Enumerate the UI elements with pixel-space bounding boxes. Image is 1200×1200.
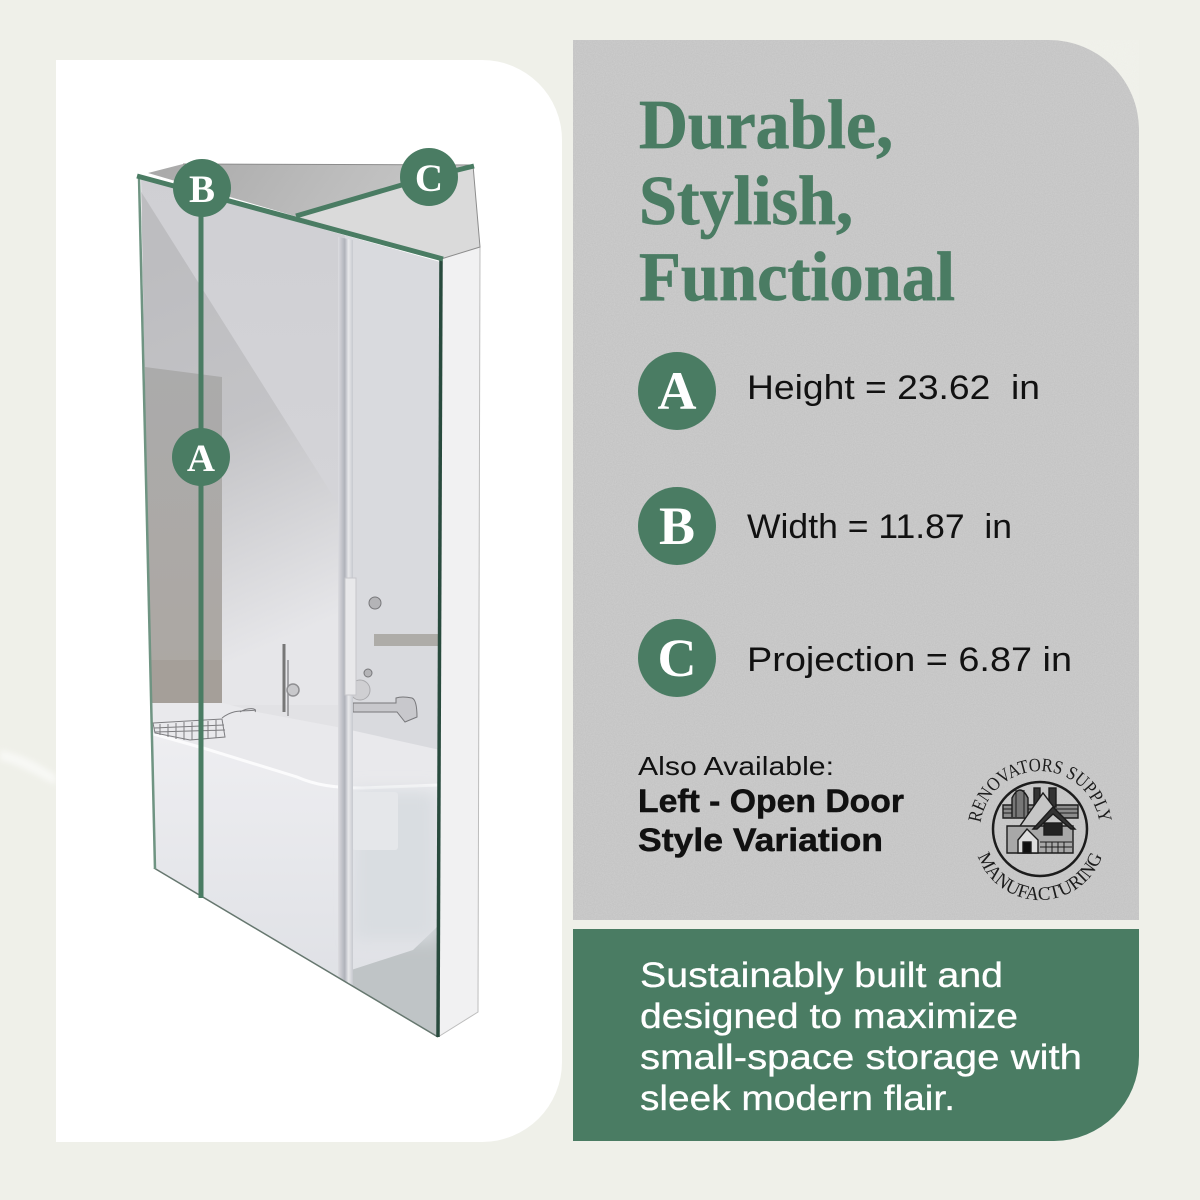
title: Functional [639,239,955,316]
callout text: Sustainably built and [640,956,1003,995]
also available note [638,751,904,858]
spec: projection: Projection = 6.87 in [747,641,1072,679]
hand shower [284,644,299,716]
logo house [1003,788,1078,853]
tub caddy [153,709,256,740]
shelf bar [374,634,440,646]
grey card [573,40,1139,920]
card grain [573,40,1139,920]
white card [56,60,562,1142]
waste bin [359,796,398,850]
side face outline [438,247,480,1037]
cabinet top face [148,164,480,259]
spec: height: Height = 23.62 in [747,369,1040,407]
marker C: C [415,157,443,200]
spec: height [638,352,1040,430]
tub rim shadow [150,733,440,788]
logo: Renovators Supply Manufacturing: MANUFACTURING [978,851,1102,900]
cabinet side face [438,247,480,1037]
title: Stylish, [639,163,853,240]
also available note: Style Variation [638,822,883,858]
callout text: designed to maximize [640,997,1018,1036]
callout text: sleek modern flair. [640,1079,955,1118]
logo: Renovators Supply Manufacturing: RENOVATORS SUPPLY [968,758,1112,822]
title: Durable, [639,87,893,164]
marker C [400,148,458,206]
title [639,87,955,316]
panel: sustainability callout [573,929,1139,1141]
tub front [154,800,437,956]
marker A: A [187,437,215,480]
marker B: B [189,168,215,211]
panel: product image [56,60,562,1142]
dimension line: projection [296,166,474,216]
taps [350,597,417,722]
left edge [139,177,155,869]
green card [573,929,1139,1141]
spec: projection: C [658,628,696,688]
callout text [640,956,1082,1118]
spec: width: Width = 11.87 in [747,508,1012,546]
logo: Renovators Supply Manufacturing [968,758,1112,900]
spec: width: B [659,496,695,556]
also available note: Left - Open Door [638,783,904,819]
marker B [173,159,231,217]
spec: height: A [658,361,696,421]
background light streak [0,750,56,785]
right edge [438,260,441,1037]
shower post bracket [345,578,356,695]
dimension line: width [137,176,443,259]
spec: width [638,487,1012,565]
right tub shade [353,790,437,940]
floor [353,928,436,1035]
callout text: small-space storage with [640,1038,1082,1077]
shower post reflection [338,237,353,986]
top face shelf highlight [296,166,480,259]
spec: projection [638,619,1072,697]
tub rim [152,703,438,786]
top face outline [183,164,480,259]
marker A [172,428,230,486]
panel: specifications [573,40,1139,920]
mirror bottom edge [154,868,438,1037]
also available note: Also Available: [638,751,834,781]
mirror door with bathroom reflection [130,170,450,1040]
dimension line: height [198,188,204,898]
